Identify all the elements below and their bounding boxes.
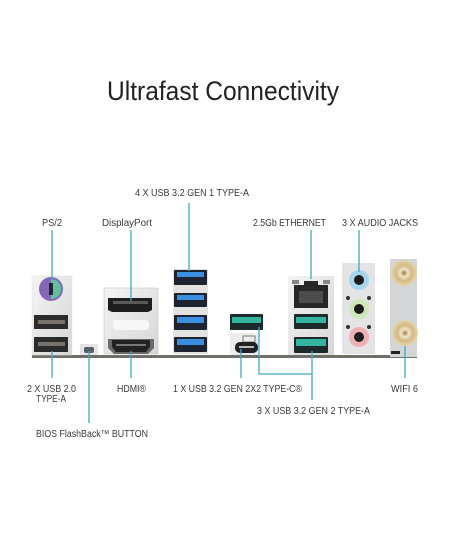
label: 2 x USB 2.0: [27, 384, 76, 405]
label: 3 x audio jacks: 3 X AUDIO JACKS: [342, 218, 418, 229]
title: Ultrafast Connectivity: [107, 76, 339, 106]
label: 2.5Gb Ethernet: 2.5Gb ETHERNET: [253, 218, 326, 229]
port: Ethernet and USB Gen 2: [288, 276, 334, 355]
label: 4 x USB 3.2 Gen 1: 4 X USB 3.2 GEN 1 TYPE-A: [135, 188, 249, 199]
port: USB 3.2 Gen 1 stack: [173, 269, 208, 354]
label: 2 x USB 2.0: 2 X USB 2.0: [27, 384, 76, 395]
port: PS/2 and USB 2.0 stack: [32, 276, 72, 355]
label: 3 x USB Gen 2: 3 X USB 3.2 GEN 2 TYPE-A: [257, 406, 370, 417]
callout lines: [52, 203, 405, 423]
label: Type-C: 1 X USB 3.2 GEN 2X2 TYPE-C®: [173, 384, 303, 395]
port: green USB Type-A and Type-C: [230, 314, 263, 355]
label: HDMI: HDMI®: [117, 384, 147, 395]
port: audio jacks: [342, 263, 375, 354]
label: 2 x USB 2.0: TYPE-A: [36, 394, 66, 405]
label: PS/2: PS/2: [42, 218, 62, 229]
port: BIOS FlashBack button: [80, 344, 98, 355]
label: BIOS FlashBack: BIOS FlashBack™ BUTTON: [36, 429, 148, 440]
port: DisplayPort and HDMI: [104, 288, 158, 354]
label: WiFi 6: WIFI 6: [391, 384, 418, 395]
io panel base bar: [32, 355, 417, 358]
label: DisplayPort: DisplayPort: [102, 218, 152, 229]
port: WiFi antenna connectors: [390, 259, 418, 357]
